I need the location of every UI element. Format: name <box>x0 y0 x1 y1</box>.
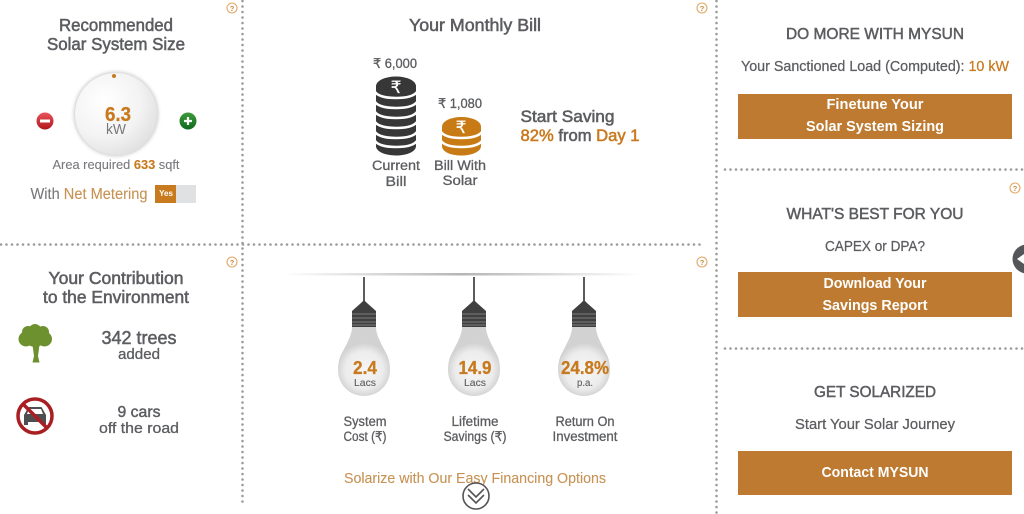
button: finetune: Solar System Sizing <box>806 118 944 135</box>
dial: system size 6.3 kW: 6.3 <box>105 104 131 126</box>
bulb: return on investment: p.a. <box>577 378 593 389</box>
bulb: lifetime savings <box>448 277 500 396</box>
callout: start saving <box>520 108 640 145</box>
callout: start saving: 82% from Day 1 <box>520 127 640 145</box>
text: solar journey: Start Your Solar Journey <box>795 417 956 433</box>
panel: do more with mysun <box>738 26 1012 139</box>
help icon: ? <box>1013 184 1018 193</box>
shelf <box>283 273 641 276</box>
icon: tree <box>18 324 52 362</box>
heading: recommended solar system size: Recommended <box>59 15 173 35</box>
heading: recommended solar system size <box>47 15 185 54</box>
panel: recommended solar system size <box>30 3 237 203</box>
heading: what's best for you: WHAT'S BEST FOR YOU <box>786 206 964 223</box>
heading: your contribution to the environment: Your Contribution <box>48 268 184 288</box>
label: bill with solar amount: ₹ 1,080 <box>438 96 482 111</box>
panel: contribution to the environment <box>18 257 237 437</box>
text: capex or dpa: CAPEX or DPA? <box>825 239 925 255</box>
label: current bill: Current <box>372 158 420 173</box>
label: lifetime savings: Savings (₹) <box>444 429 506 444</box>
button: finetune: Finetune Your <box>826 96 924 113</box>
help icon <box>227 257 237 267</box>
help icon <box>1010 183 1020 193</box>
button: increase <box>180 112 196 130</box>
panel: your monthly bill <box>372 3 707 189</box>
heading: get solarized: GET SOLARIZED <box>814 384 936 401</box>
help icon <box>697 3 707 13</box>
bulb: system cost <box>338 277 390 396</box>
panel: financial summary bulbs <box>283 257 707 509</box>
bulb: system cost: Lacs <box>354 378 376 389</box>
label: system cost <box>344 414 386 444</box>
icon: dark coin stack: ₹ <box>391 78 401 97</box>
help icon: ? <box>230 4 235 13</box>
help icon <box>227 3 237 13</box>
button: contact mysun: Contact MYSUN <box>822 464 928 481</box>
label: return on investment: Return On <box>556 414 614 429</box>
icon: dark coin stack <box>375 76 417 156</box>
icon: orange coin stack <box>441 117 482 156</box>
text: financing options: Solarize with Our Easy Financing Options <box>344 470 606 487</box>
label: bill with solar <box>434 158 486 188</box>
button: finetune <box>738 94 1012 139</box>
text: cars off the road: off the road <box>99 420 179 437</box>
label: bill with solar: Solar <box>442 173 478 188</box>
button: decrease <box>36 112 54 130</box>
bulb: system cost: 2.4 <box>353 358 377 378</box>
dial: system size 6.3 kW <box>74 72 158 156</box>
text: area required: Area required 633 sqft <box>52 157 180 172</box>
button: contact mysun <box>738 451 1012 495</box>
button: download report: Savings Report <box>822 297 928 314</box>
panel: get solarized <box>738 384 1012 495</box>
text: trees added: added <box>118 346 160 363</box>
label: current bill: Bill <box>386 174 406 189</box>
icon: scroll down chevrons <box>463 483 489 509</box>
label: return on investment: Investment <box>552 429 618 444</box>
bulb: return on investment <box>558 277 610 396</box>
icon: orange coin stack: ₹ <box>456 118 466 137</box>
bulb: return on investment: 24.8% <box>561 358 609 378</box>
heading: recommended solar system size: Solar System Size <box>47 34 185 54</box>
icon: no cars <box>18 399 52 433</box>
text: cars off the road <box>99 404 179 437</box>
label: return on investment <box>552 414 618 444</box>
panel: what's best for you <box>738 183 1024 317</box>
button: download report: Download Your <box>824 275 927 292</box>
help icon: ? <box>230 258 235 267</box>
toggle: yes <box>155 185 196 203</box>
text: trees added <box>102 328 176 363</box>
help icon: ? <box>700 258 705 267</box>
side tab <box>1012 244 1024 274</box>
heading: your monthly bill: Your Monthly Bill <box>409 15 541 35</box>
button: download report <box>738 272 1012 317</box>
help icon <box>697 257 707 267</box>
bulb: lifetime savings: 14.9 <box>458 358 492 378</box>
heading: your contribution to the environment: to the Environment <box>43 287 189 307</box>
text: trees added: 342 trees <box>102 328 176 348</box>
label: lifetime savings: Lifetime <box>452 414 498 429</box>
dial: system size 6.3 kW: kW <box>106 121 127 138</box>
heading: do more with mysun: DO MORE WITH MYSUN <box>786 26 964 43</box>
help icon: ? <box>700 4 705 13</box>
text: sanctioned load: Your Sanctioned Load (Computed): 10 kW <box>741 59 1009 75</box>
label: current bill <box>372 158 420 189</box>
toggle: yes: Yes <box>159 189 173 198</box>
label: current bill amount: ₹ 6,000 <box>373 56 417 71</box>
label: system cost: Cost (₹) <box>344 429 386 444</box>
text: with net metering: With Net Metering <box>30 186 148 203</box>
callout: start saving: Start Saving <box>520 108 614 126</box>
bulb: lifetime savings: Lacs <box>464 378 486 389</box>
label: system cost: System <box>344 414 386 429</box>
text: cars off the road: 9 cars <box>118 404 160 421</box>
label: lifetime savings <box>444 414 506 444</box>
heading: your contribution to the environment <box>43 268 189 307</box>
label: bill with solar: Bill With <box>434 158 486 173</box>
